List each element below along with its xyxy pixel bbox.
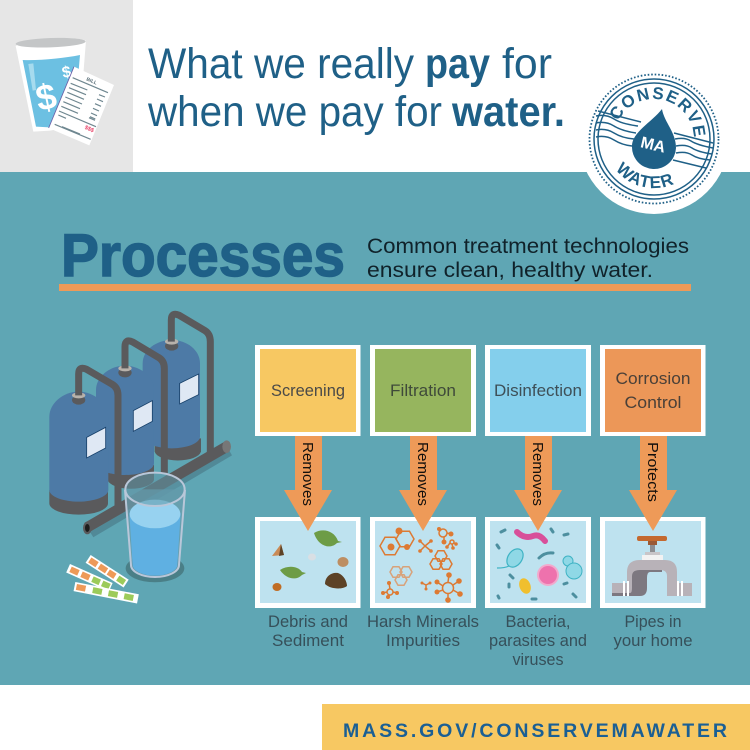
badge: Conserve MA Water: WATER bbox=[617, 161, 674, 188]
label: harsh minerals impurities: Harsh Minerals bbox=[367, 613, 479, 631]
process box: Screening bbox=[255, 345, 360, 436]
arrow: Disinfection removes: Removes bbox=[529, 442, 546, 506]
label: pipes in your home bbox=[614, 613, 692, 650]
badge: Conserve MA Water bbox=[586, 74, 722, 214]
process box: Corrosion Control bbox=[600, 345, 706, 436]
result box: bacteria, parasites and viruses bbox=[485, 517, 591, 608]
arrow: Disinfection removes bbox=[514, 436, 562, 531]
arrow: Corrosion control protects bbox=[629, 436, 677, 531]
label: bacteria, parasites and viruses: parasites and bbox=[489, 632, 587, 650]
result box: pipes in your home bbox=[600, 517, 706, 608]
arrow: Corrosion control protects: Protects bbox=[644, 442, 661, 502]
title: when we pay for bbox=[147, 88, 442, 136]
label: pipes in your home: your home bbox=[614, 632, 692, 650]
footer URL banner: MASS.GOV/CONSERVEMAWATER bbox=[343, 720, 727, 742]
orange heading rule bbox=[59, 284, 691, 291]
title: water. bbox=[451, 88, 565, 136]
process box: Screening: Screening bbox=[271, 381, 345, 400]
title: pay bbox=[425, 40, 490, 88]
badge: Conserve MA Water: CONSERVE bbox=[610, 87, 706, 137]
process box: Disinfection bbox=[485, 345, 591, 436]
process box: Filtration: Filtration bbox=[390, 381, 456, 400]
subheading: Common treatment technologies bbox=[367, 235, 689, 258]
subheading: ensure clean, healthy water. bbox=[367, 259, 653, 282]
label: harsh minerals impurities: Impurities bbox=[386, 632, 460, 650]
subheading bbox=[367, 235, 689, 282]
icon: water glass and bill: $ bbox=[61, 64, 73, 82]
result box: debris and sediment bbox=[255, 517, 360, 608]
process box: Corrosion Control: Corrosion bbox=[616, 369, 690, 388]
icon: water glass and bill: $$$ bbox=[84, 125, 95, 135]
illustration: treatment tanks, glass and test strips bbox=[49, 314, 232, 603]
label: bacteria, parasites and viruses: Bacteria, bbox=[506, 613, 570, 631]
title: for bbox=[502, 40, 552, 88]
title bbox=[147, 40, 565, 136]
label: bacteria, parasites and viruses: viruses bbox=[512, 651, 564, 669]
teal main panel bbox=[0, 172, 750, 685]
result box: harsh minerals bbox=[370, 517, 476, 608]
arrow: Filtration removes: Removes bbox=[414, 442, 431, 506]
badge: Conserve MA Water: MA bbox=[639, 134, 667, 157]
label: debris and sediment: Sediment bbox=[272, 632, 344, 650]
label: debris and sediment bbox=[268, 613, 348, 650]
arrow: Screening removes bbox=[284, 436, 332, 531]
process box: Disinfection: Disinfection bbox=[494, 381, 582, 400]
label: pipes in your home: Pipes in bbox=[624, 613, 682, 631]
label: bacteria, parasites and viruses bbox=[489, 613, 587, 669]
title: What we really bbox=[148, 40, 414, 88]
icon: water glass and bill bbox=[16, 37, 114, 145]
arrow: Screening removes: Removes bbox=[299, 442, 316, 506]
grey header icon panel bbox=[0, 0, 133, 172]
label: harsh minerals impurities bbox=[367, 613, 479, 650]
process box: Corrosion Control: Control bbox=[624, 393, 682, 412]
icon: water glass and bill: BILL bbox=[85, 77, 98, 86]
icon: water glass and bill: $ bbox=[32, 75, 60, 119]
arrow: Filtration removes bbox=[399, 436, 447, 531]
label: debris and sediment: Debris and bbox=[268, 613, 348, 631]
process box: Filtration bbox=[370, 345, 476, 436]
heading: Processes: Processes bbox=[61, 222, 345, 289]
footer URL banner bbox=[322, 704, 750, 750]
